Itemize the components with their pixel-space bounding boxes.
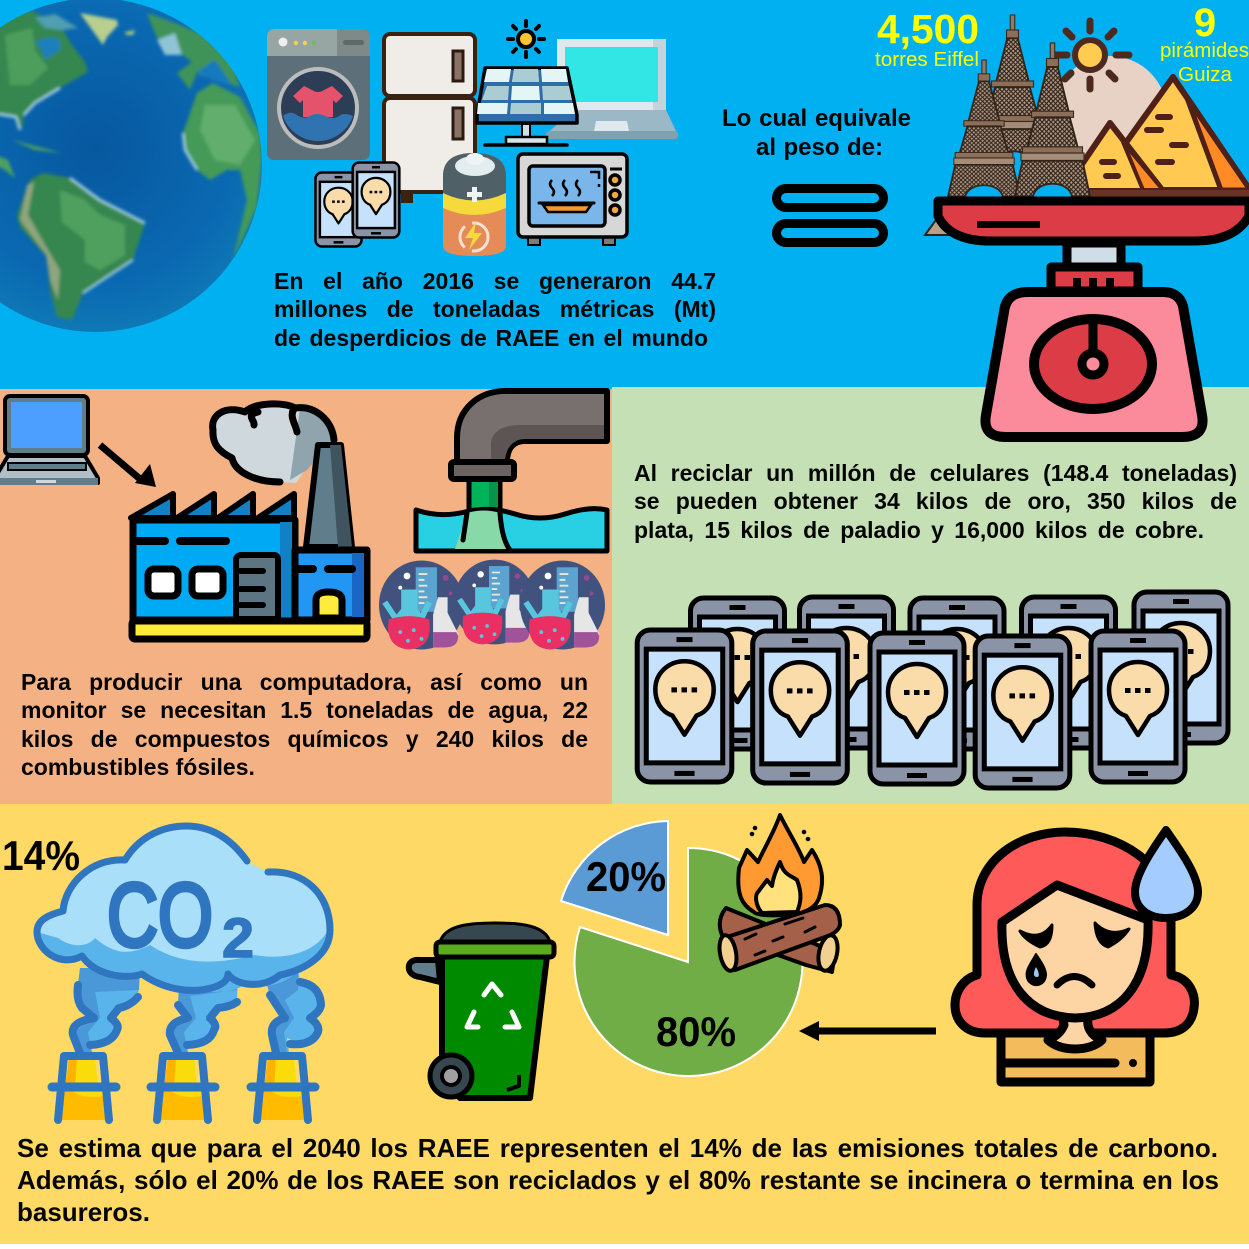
label: 14%: 14% bbox=[2, 832, 80, 879]
icon: crying woman bbox=[955, 830, 1198, 1082]
icon: microwave bbox=[518, 154, 627, 245]
text: recycling a million phones: plata, 15 kilos de paladio y 16,000 kilos de cobre. bbox=[634, 517, 1204, 543]
text: 2016 e-waste statement: de desperdicios de RAEE en el mundo bbox=[274, 325, 708, 351]
arrow: to pie chart bbox=[799, 1021, 936, 1041]
text: recycling a million phones: se pueden obtener 34 kilos de oro, 350 kilos de bbox=[634, 488, 1237, 514]
icon: smokestacks bbox=[52, 1056, 315, 1120]
icon: Eiffel towers bbox=[925, 15, 1090, 235]
text: 2016 e-waste statement: millones de toneladas métricas (Mt) bbox=[274, 296, 716, 322]
icon: laptop computer bbox=[0, 396, 98, 485]
icon: refrigerator bbox=[384, 34, 475, 203]
icon: sun and pyramids bbox=[1053, 21, 1249, 198]
text: weight equivalence: al peso de: bbox=[756, 134, 883, 161]
text: weight equivalence: Lo cual equivale bbox=[722, 105, 911, 132]
icon: two small phones bbox=[315, 162, 399, 246]
icon: factory bbox=[131, 404, 367, 639]
text: 2040 carbon emissions bbox=[17, 1133, 1219, 1227]
label: 80%: 80% bbox=[656, 1008, 736, 1055]
icon: row of back phones bbox=[690, 592, 1228, 749]
text: recycling a million phones bbox=[634, 460, 1237, 543]
text: recycling a million phones: Al reciclar un millón de celulares (148.4 toneladas) bbox=[634, 460, 1237, 486]
equals sign bbox=[776, 188, 884, 242]
text: 2040 carbon emissions: Además, sólo el 20% de los RAEE son reciclados y el 80% restante se incinera o termina en los bbox=[17, 1165, 1219, 1195]
panel: emissions background bbox=[0, 804, 1249, 1244]
pie slice: 20% bbox=[561, 821, 668, 935]
icon: burning logs bbox=[717, 815, 841, 972]
text: weight equivalence bbox=[722, 105, 911, 161]
stat label: Guiza: Guiza bbox=[1178, 63, 1233, 86]
icon: laptop bbox=[546, 39, 678, 139]
icon: kitchen scale bbox=[938, 201, 1249, 437]
icon: waste water pipe bbox=[416, 391, 607, 551]
text: 2040 carbon emissions: basureros. bbox=[17, 1197, 150, 1227]
stat label: pirámides: pirámides bbox=[1160, 39, 1249, 62]
icon: row of front phones bbox=[637, 630, 1185, 788]
icon: chemistry flasks bbox=[379, 560, 605, 649]
icon: CO2 cloud: CO bbox=[107, 866, 213, 966]
stat: 9: 9 bbox=[1194, 1, 1216, 45]
label: 20%: 20% bbox=[586, 853, 666, 900]
text: computer production: monitor se necesitan 1.5 toneladas de agua, 22 bbox=[21, 697, 588, 723]
icon: CO2 cloud: 2 bbox=[222, 906, 254, 969]
stat label: torres Eiffel: torres Eiffel bbox=[875, 48, 979, 71]
text: computer production: kilos de compuestos químicos y 240 kilos de bbox=[21, 726, 588, 752]
icon: CO2 cloud bbox=[37, 826, 330, 992]
text: computer production: combustibles fósiles. bbox=[21, 754, 255, 780]
panel: computer production background bbox=[0, 389, 612, 804]
icon: washing machine bbox=[267, 29, 370, 160]
pie slice: 80% bbox=[574, 848, 802, 1076]
pie chart bbox=[561, 821, 802, 1076]
text: 2016 e-waste statement bbox=[274, 268, 716, 351]
icon: smoke plumes bbox=[73, 968, 321, 1053]
text: 2016 e-waste statement: En el año 2016 se generaron 44.7 bbox=[274, 268, 716, 294]
icon: Earth globe bbox=[0, 0, 262, 332]
panel: recycling background bbox=[612, 387, 1249, 804]
icon: solar panel with sun bbox=[477, 21, 577, 145]
panel: global waste background bbox=[0, 0, 1249, 389]
icon: recycling bin bbox=[409, 923, 554, 1098]
arrow: laptop to factory bbox=[100, 445, 156, 487]
text: computer production: Para producir una computadora, así como un bbox=[21, 669, 588, 695]
stat: 4,500: 4,500 bbox=[877, 6, 979, 52]
icon: battery bbox=[443, 153, 506, 256]
text: computer production bbox=[21, 669, 588, 780]
text: 2040 carbon emissions: Se estima que para el 2040 los RAEE representen el 14% de las emisiones totales de carbono. bbox=[17, 1133, 1218, 1163]
